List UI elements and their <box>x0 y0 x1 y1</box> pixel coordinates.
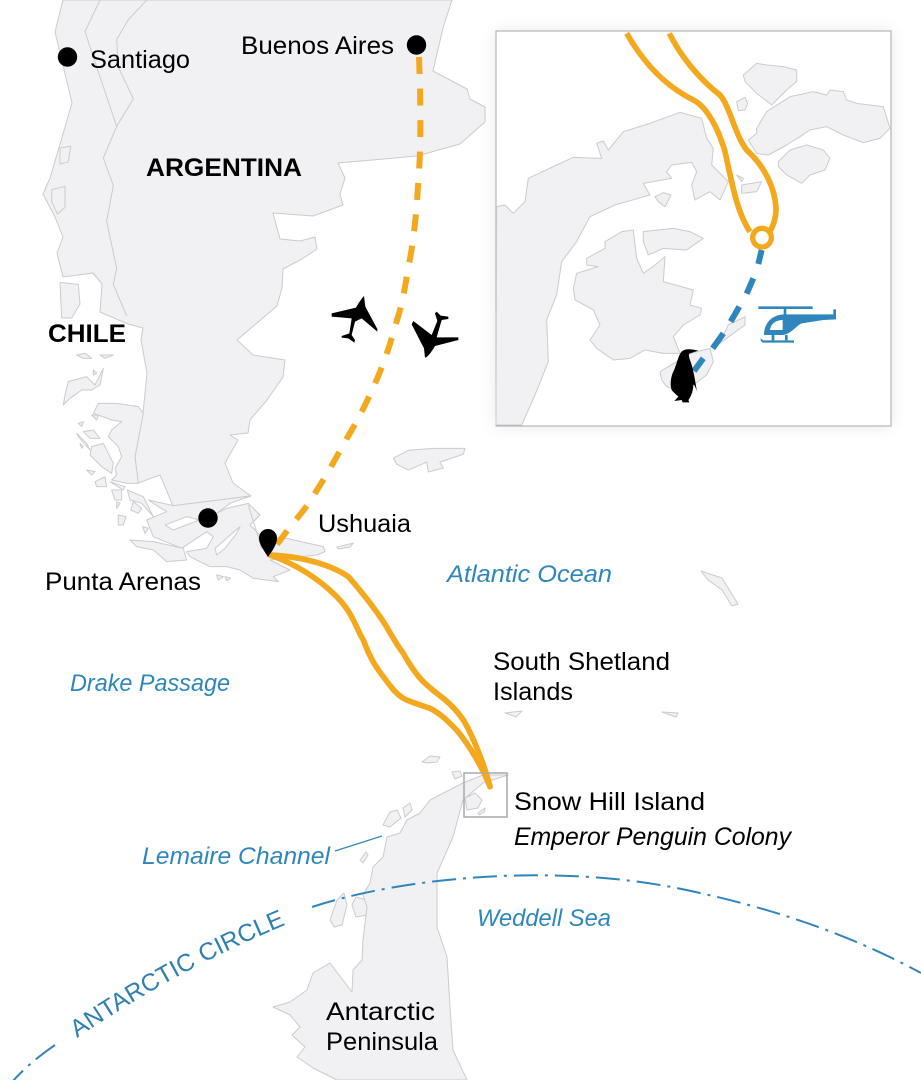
label: Antarctic Peninsula: Antarctic <box>326 998 435 1026</box>
icon: plane northbound <box>332 296 377 343</box>
marker: Ushuaia pin <box>259 529 277 557</box>
label: Drake Passage: Drake Passage <box>70 670 230 697</box>
label: Santiago: Santiago <box>90 46 190 74</box>
label: Weddell Sea: Weddell Sea <box>477 905 611 932</box>
map: South America land <box>43 0 485 582</box>
inset ship route <box>627 33 776 232</box>
label: Atlantic Ocean: Atlantic Ocean <box>445 561 612 588</box>
icon: helicopter <box>758 306 836 343</box>
panel: inset map <box>496 31 891 426</box>
label: Snow Hill Island: Snow Hill Island <box>514 788 705 816</box>
icon: plane southbound <box>412 312 458 358</box>
snow hill locator box <box>464 773 507 817</box>
label: Chile: CHILE <box>48 320 126 348</box>
label: Antarctic Peninsula <box>326 998 438 1056</box>
map: Atlantic islands and Antarctic Peninsula land <box>273 571 738 1080</box>
inset land <box>496 63 890 425</box>
label: South Shetland Islands: Islands <box>493 678 573 706</box>
inset route stop circle <box>753 228 771 247</box>
marker: Punta Arenas <box>198 508 218 528</box>
label: Antarctic Peninsula: Peninsula <box>326 1028 438 1056</box>
label: South Shetland Islands: South Shetland <box>493 648 670 676</box>
flight route: dashed orange <box>273 57 420 549</box>
label: Emperor Penguin Colony: Emperor Penguin Colony <box>514 823 792 851</box>
icon: penguin <box>671 349 698 402</box>
leader line: Lemaire Channel <box>335 836 382 851</box>
inset helicopter route <box>694 250 762 371</box>
ship route: outbound and return <box>270 555 490 787</box>
label: Ushuaia: Ushuaia <box>318 510 411 538</box>
marker: Santiago <box>58 47 77 67</box>
Antarctic Circle line <box>12 875 921 1080</box>
label: Buenos Aires: Buenos Aires <box>241 32 394 60</box>
label: Lemaire Channel: Lemaire Channel <box>142 843 331 870</box>
label: Punta Arenas: Punta Arenas <box>45 568 201 596</box>
label: Antarctic Circle: ANTARCTIC CIRCLE <box>73 910 285 1038</box>
label: South Shetland Islands <box>493 648 670 706</box>
marker: Buenos Aires <box>407 35 426 55</box>
label: Argentina: ARGENTINA <box>146 154 302 182</box>
inset shadow <box>496 31 891 426</box>
